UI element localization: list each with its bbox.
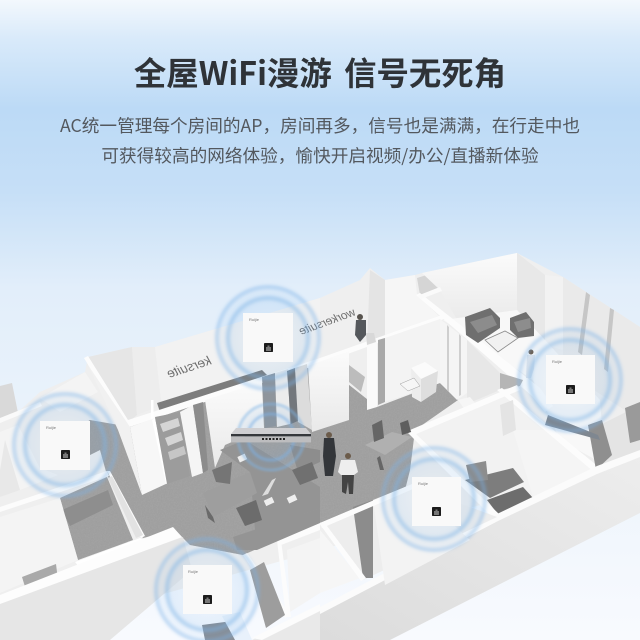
outer wall lower left xyxy=(0,537,192,640)
description text xyxy=(60,113,580,168)
office floor plan xyxy=(0,253,640,640)
AP and wifi signal: bottom xyxy=(154,537,260,640)
person: man in suit xyxy=(323,432,336,476)
people xyxy=(323,314,535,494)
AP and wifi signal: right xyxy=(517,327,623,433)
corridor chairs with stripes xyxy=(155,412,190,484)
workstation desks xyxy=(203,440,320,550)
wall strip lower left room right side xyxy=(107,471,145,538)
left wall block xyxy=(88,365,142,495)
white wall: long lounge diagonal xyxy=(416,293,553,412)
top white strip left xyxy=(0,402,42,423)
small box by carpet xyxy=(458,397,476,410)
office wall behind switch xyxy=(205,382,264,468)
printer xyxy=(400,362,438,402)
small rooms bottom centre xyxy=(243,484,497,640)
AP and wifi signal: lower right: Ruijie xyxy=(418,481,429,486)
lower left room floor xyxy=(60,477,133,560)
back walls xyxy=(0,253,640,640)
AC switch with wifi signal xyxy=(231,402,311,472)
lounge floor xyxy=(443,310,605,465)
white wall: right room diagonal xyxy=(497,388,600,472)
AP and wifi signal: left: Ruijie xyxy=(46,425,57,430)
large white wall lower left xyxy=(0,498,78,593)
sofas and coffee table xyxy=(465,308,534,352)
AP and wifi signal: top: Ruijie xyxy=(249,317,260,322)
AP and wifi signal: left xyxy=(12,392,118,498)
AP and wifi signal: lower right xyxy=(381,446,487,552)
person: by lounge xyxy=(526,350,535,378)
reception counter strip xyxy=(157,370,267,412)
grey carpet floor xyxy=(60,362,458,555)
far right wall xyxy=(597,405,640,470)
AP and wifi signal: top xyxy=(215,285,321,391)
wall upright by room xyxy=(500,400,516,436)
description text: AC统一管理每个房间的AP，房间再多，信号也是满满，在行走中也 xyxy=(60,113,580,138)
white wall: right room top xyxy=(410,385,520,435)
white wall: right room left xyxy=(408,431,500,519)
person: man in white shirt xyxy=(338,453,358,494)
AP and wifi signal: bottom: Ruijie xyxy=(188,569,199,574)
AP and wifi signal: right: Ruijie xyxy=(552,359,563,364)
title: 全屋WiFi漫游 信号无死角 xyxy=(134,48,506,95)
block right of reception xyxy=(367,340,377,410)
person: standing at reception xyxy=(355,314,376,345)
right room interior xyxy=(412,393,597,517)
mirrored wall lettering: kersuite xyxy=(165,353,213,381)
meeting table xyxy=(365,420,412,470)
description text: 可获得较高的网络体验，愉快开启视频/办公/直播新体验 xyxy=(101,143,539,168)
outer wall lower right xyxy=(320,455,640,640)
mirrored wall lettering: workersuite xyxy=(298,307,357,338)
reception desk and chairs xyxy=(349,365,365,392)
mirrored wall lettering xyxy=(165,307,357,381)
white wall stub xyxy=(151,400,154,420)
white wall: upper corridor xyxy=(84,315,444,428)
column by corridor xyxy=(180,405,203,477)
corridor floor bottom xyxy=(202,620,245,640)
wall face upper left xyxy=(0,425,58,495)
